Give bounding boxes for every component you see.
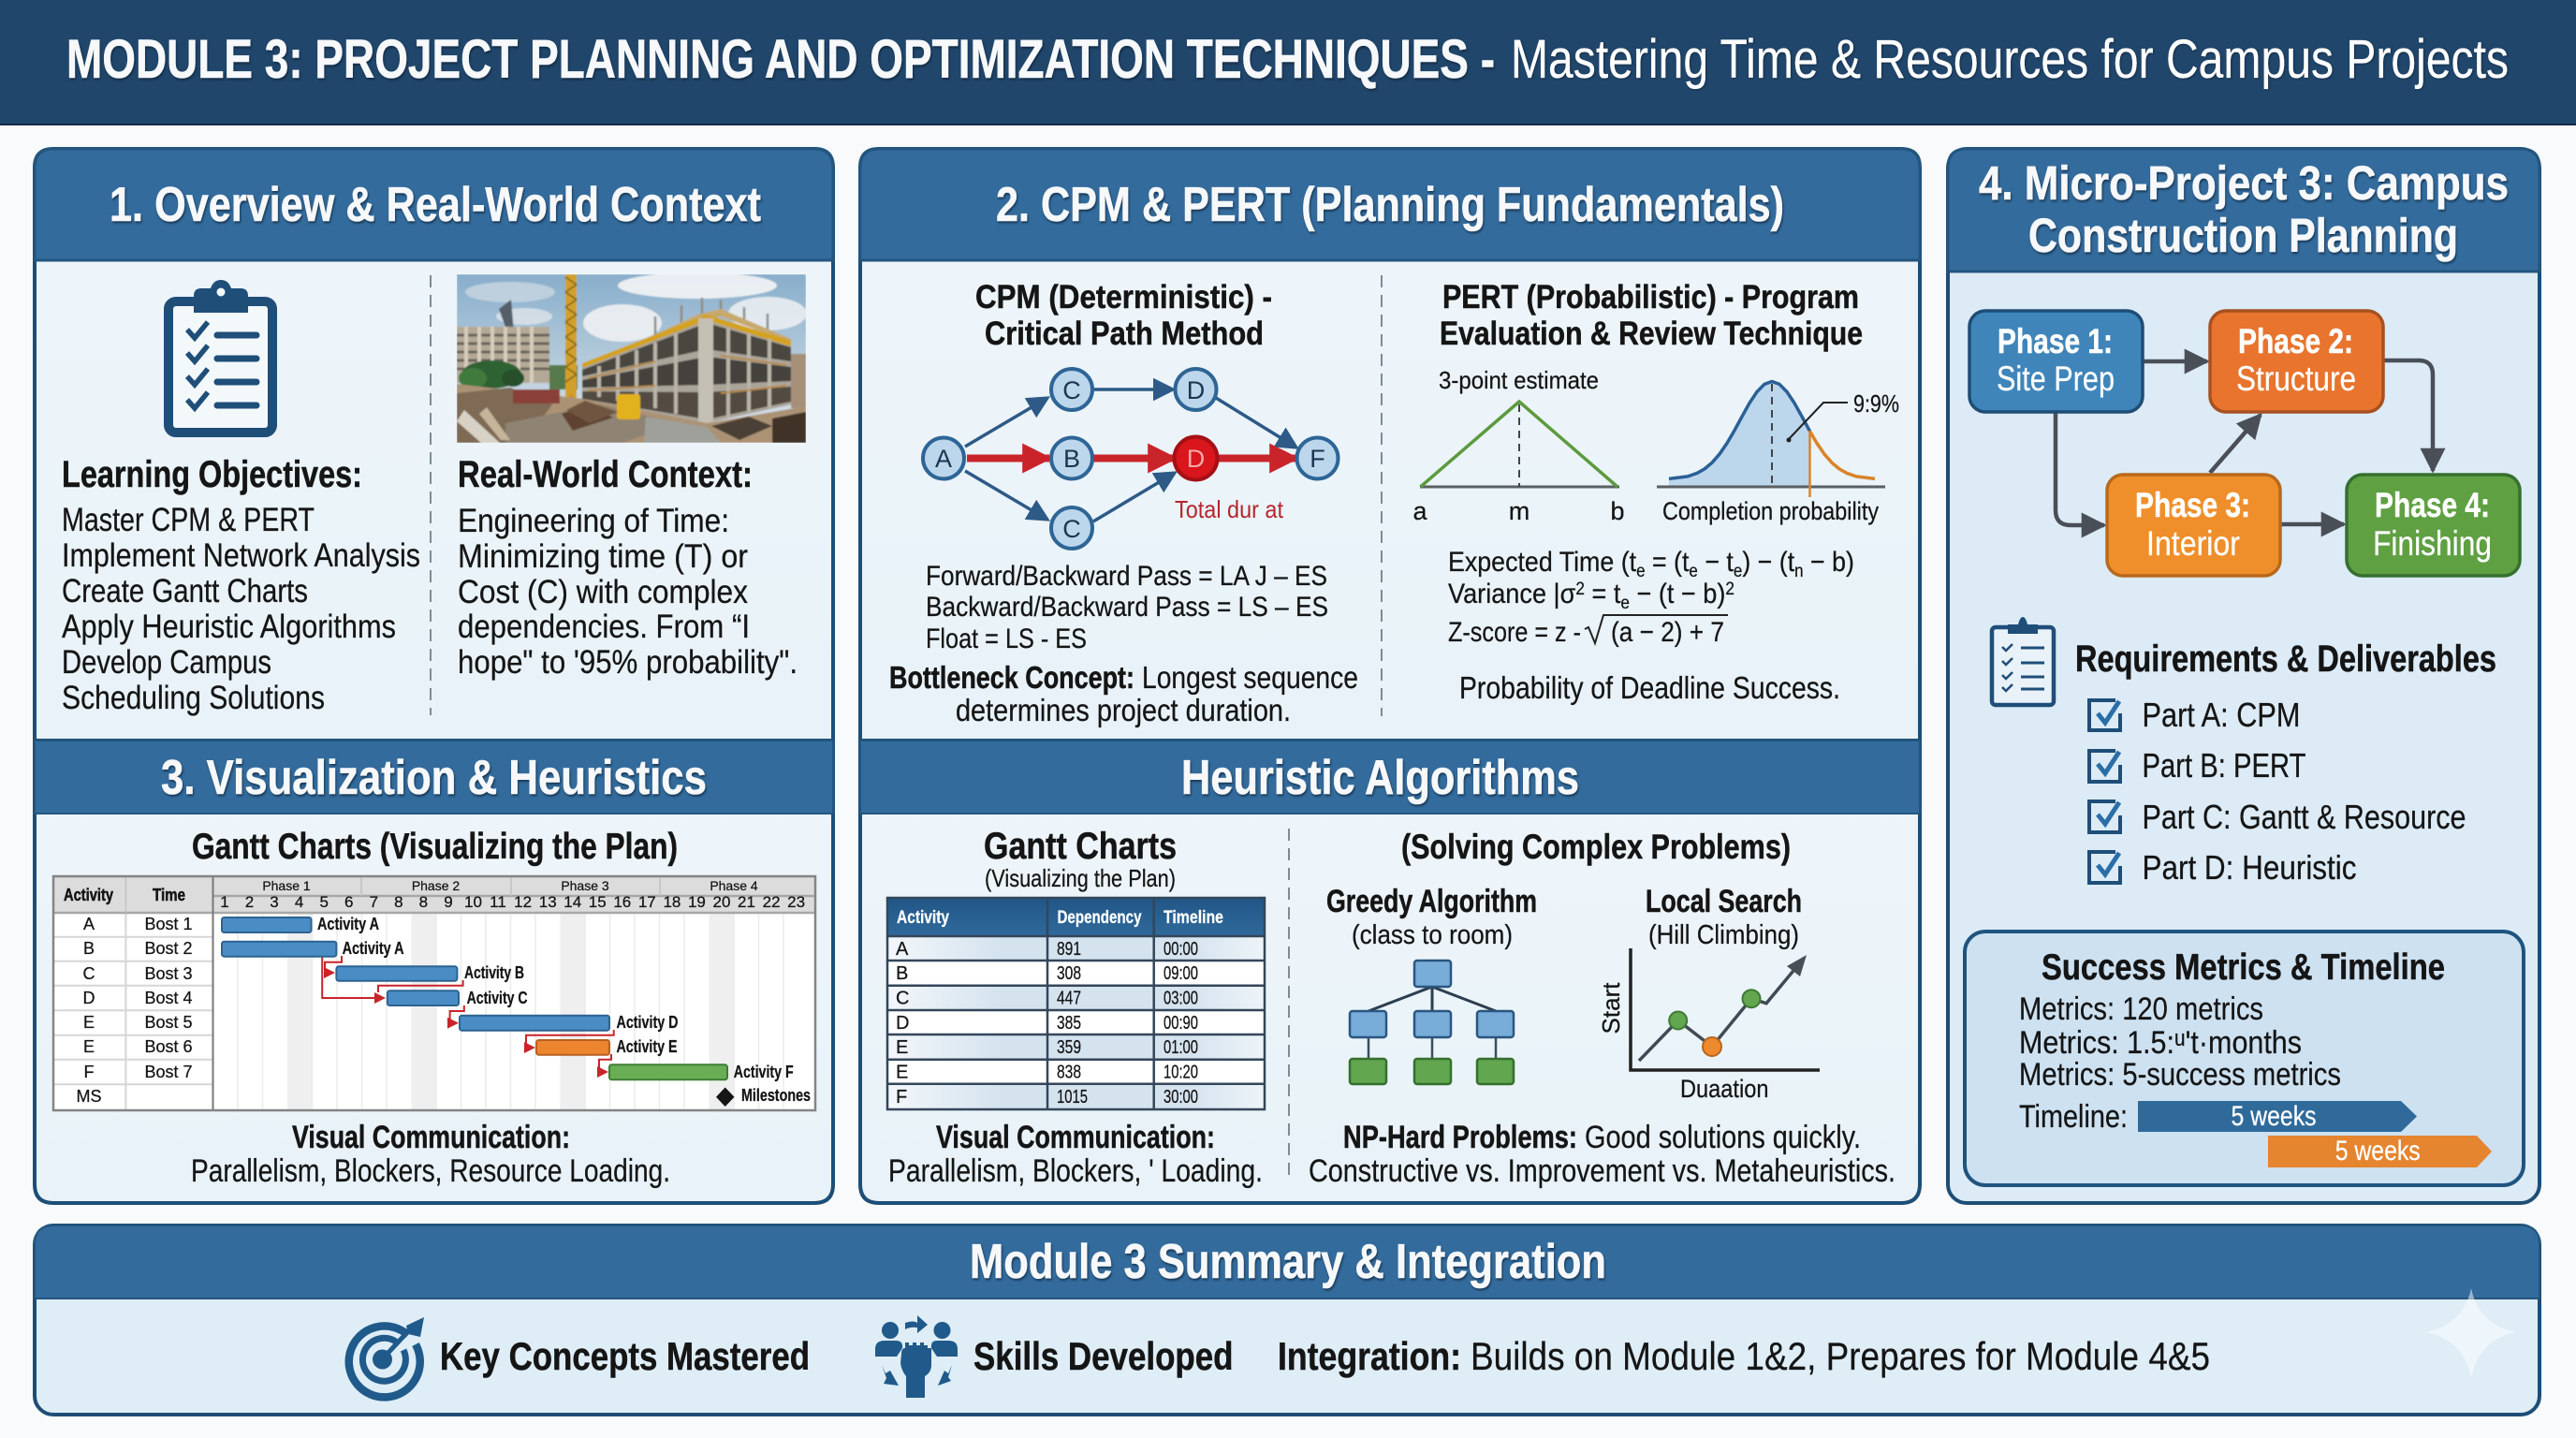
text block: PERT formulas: ) − (t bbox=[1742, 547, 1795, 578]
table: activity schedule: 308 bbox=[1057, 963, 1081, 984]
table: activity schedule: 03:00 bbox=[1164, 989, 1198, 1009]
chart: Gantt chart: Activity B bbox=[464, 963, 524, 982]
table: activity schedule: 385 bbox=[1057, 1013, 1081, 1034]
chart: Gantt chart: Phase 3 bbox=[561, 878, 609, 893]
text block: PERT formulas bbox=[1448, 547, 1854, 648]
text block: real-world context: Real-World Context: bbox=[458, 454, 753, 495]
chart: Gantt chart: 1 bbox=[220, 893, 229, 911]
text block: visual communication bbox=[888, 1120, 1263, 1189]
text block: bottleneck concept: determines project duration. bbox=[956, 693, 1291, 727]
chart: Gantt chart: 10 bbox=[464, 893, 482, 911]
checklist: parts: Part B: PERT bbox=[2142, 746, 2306, 785]
panel: success metrics & timeline bbox=[1965, 932, 2524, 1185]
text block: PERT formulas: 2 bbox=[1725, 580, 1734, 599]
text block: learning objectives: Implement Network Analysis bbox=[62, 537, 420, 574]
heading: Gantt charts: Gantt Charts (Visualizing the Plan) bbox=[192, 827, 678, 867]
text block: metrics bbox=[2019, 991, 2341, 1135]
chart: Gantt chart: E bbox=[83, 1013, 95, 1032]
chart: Gantt chart: Bost 7 bbox=[144, 1063, 193, 1081]
phase 3 box bbox=[2107, 475, 2280, 576]
table: activity schedule: C bbox=[896, 989, 909, 1009]
chart: Gantt chart: 5 bbox=[319, 893, 329, 911]
phase 4 box: Phase 4: bbox=[2375, 486, 2490, 524]
chart: Gantt chart: 8 bbox=[419, 893, 428, 911]
heading: CPM bbox=[975, 279, 1272, 352]
panel: 1. Overview & Real-World Context bbox=[35, 149, 833, 741]
chart: Gantt chart: Bost 6 bbox=[144, 1037, 193, 1056]
chart: Gantt chart: Activity D bbox=[616, 1013, 678, 1032]
table: activity schedule: 09:00 bbox=[1164, 963, 1198, 984]
table: activity schedule: 10:20 bbox=[1164, 1062, 1198, 1082]
chart: Gantt chart: 7 bbox=[370, 893, 378, 911]
chart: hill climbing: Duaation bbox=[1680, 1075, 1769, 1103]
heading: Gantt charts table: (Visualizing the Plan) bbox=[985, 864, 1176, 892]
chart: hill climbing bbox=[1597, 948, 1820, 1103]
table: activity schedule: 359 bbox=[1057, 1037, 1081, 1058]
table: activity schedule: Activity bbox=[897, 908, 949, 928]
heading: CPM: CPM (Deterministic) - bbox=[975, 279, 1272, 315]
text block: real-world context: hope" to '95% probability". bbox=[458, 644, 798, 681]
chart: Gantt chart: 22 bbox=[763, 893, 781, 911]
chart: 3-point estimate triangle: m bbox=[1509, 497, 1530, 525]
chart: completion probability curve: Completion probability bbox=[1662, 497, 1879, 525]
heading: Gantt charts table bbox=[984, 826, 1177, 892]
chart: Gantt chart: Activity A bbox=[317, 915, 379, 933]
timeline bar: 5 weeks orange bbox=[2268, 1136, 2492, 1167]
chart: CPM network diagram: A bbox=[935, 445, 952, 473]
panel heading: 4. Micro-Project 3: Campus bbox=[1979, 156, 2509, 210]
text block: CPM formulas bbox=[926, 561, 1328, 654]
chart: Gantt chart: Activity C bbox=[467, 989, 528, 1007]
text block: PERT formulas: − (t − b) bbox=[1630, 579, 1725, 609]
chart: Gantt chart: C bbox=[82, 964, 95, 983]
phase 1 box: Phase 1: bbox=[1998, 322, 2113, 360]
text block: learning objectives: Develop Campus bbox=[62, 644, 271, 681]
text: skills developed: Skills Developed bbox=[973, 1334, 1234, 1378]
chart: Gantt chart: Bost 1 bbox=[144, 915, 193, 933]
table: activity schedule: 891 bbox=[1057, 939, 1081, 960]
table: activity schedule: E bbox=[896, 1062, 908, 1082]
chart: 3-point estimate triangle: b bbox=[1610, 497, 1625, 525]
phase 1 box: Site Prep bbox=[1997, 360, 2115, 398]
text: key concepts mastered: Key Concepts Mastered bbox=[440, 1334, 810, 1378]
chart: Gantt chart: Milestones bbox=[741, 1086, 811, 1105]
timeline bar: 5 weeks blue: 5 weeks bbox=[2232, 1101, 2316, 1132]
icon: requirements clipboard bbox=[1992, 617, 2054, 705]
heading: greedy algorithm bbox=[1326, 884, 1537, 950]
text block: learning objectives: Master CPM & PERT bbox=[62, 502, 315, 538]
text block: PERT formulas: = t bbox=[1585, 579, 1621, 609]
chart: Gantt chart: Phase 4 bbox=[710, 878, 758, 893]
chart: Gantt chart: 14 bbox=[564, 893, 581, 911]
text block: real-world context: dependencies. From “I bbox=[458, 609, 750, 645]
chart: Gantt chart bbox=[53, 876, 815, 1110]
checklist: parts: Part A: CPM bbox=[2142, 696, 2301, 734]
text block: probability of deadline success: Probability of Deadline Success. bbox=[1459, 670, 1840, 705]
heading: greedy algorithm: (class to room) bbox=[1352, 920, 1513, 950]
table: activity schedule: 838 bbox=[1057, 1062, 1081, 1082]
chart: CPM network diagram: D bbox=[1187, 445, 1205, 473]
text: integration: Builds on Module 1&2, Prepares for Module 4&5 bbox=[1471, 1334, 2210, 1378]
text block: CPM formulas: Forward/Backward Pass = LA J – ES bbox=[926, 561, 1327, 592]
text block: NP-hard problems: NP-Hard Problems: bbox=[1343, 1120, 1577, 1155]
icon: team skills bbox=[875, 1315, 958, 1398]
text: integration: Integration: bbox=[1278, 1334, 1461, 1378]
icon: clipboard checklist bbox=[168, 280, 272, 433]
table: activity schedule: 1015 bbox=[1057, 1087, 1088, 1108]
chart: Gantt chart: 20 bbox=[713, 893, 730, 911]
panel heading: 1. Overview & Real-World Context bbox=[110, 178, 761, 232]
chart: Gantt chart: D bbox=[82, 989, 95, 1007]
chart: Gantt chart: 12 bbox=[514, 893, 532, 911]
table: activity schedule: A bbox=[896, 939, 909, 960]
text block: PERT formulas: = (t bbox=[1646, 547, 1690, 578]
panel: Module 3 summary & integration bbox=[35, 1225, 2539, 1415]
checklist: parts: Part D: Heuristic bbox=[2142, 848, 2357, 887]
phase 2 box bbox=[2210, 311, 2383, 412]
table: activity schedule: 01:00 bbox=[1164, 1037, 1198, 1058]
phase 4 box bbox=[2347, 475, 2520, 576]
text block: real-world context: Engineering of Time: bbox=[458, 503, 729, 539]
chart: Gantt chart: MS bbox=[77, 1087, 101, 1106]
chart: 3-point estimate triangle: 3-point estimate bbox=[1439, 366, 1599, 394]
chart: CPM network diagram bbox=[923, 369, 1339, 549]
flow arrows between phases bbox=[2056, 360, 2433, 525]
text block: bottleneck concept: Longest sequence bbox=[1142, 660, 1358, 695]
phase 4 box: Finishing bbox=[2373, 524, 2492, 563]
chart: completion probability curve bbox=[1657, 382, 1899, 525]
chart: Gantt chart: Phase 2 bbox=[412, 878, 460, 893]
text block: PERT formulas: e bbox=[1620, 594, 1630, 613]
phase 1 box bbox=[1969, 311, 2143, 412]
chart: Gantt chart: 6 bbox=[344, 893, 353, 911]
timeline bar: 5 weeks blue bbox=[2138, 1101, 2417, 1132]
chart: hill climbing: Start bbox=[1597, 982, 1625, 1034]
heading: success metrics: Success Metrics & Timeline bbox=[2042, 947, 2445, 988]
panel heading: Module 3 Summary & Integration bbox=[970, 1235, 1606, 1289]
chart: completion probability curve: 9:9% bbox=[1853, 389, 1899, 418]
checklist: parts bbox=[2089, 696, 2466, 887]
icon: sparkle bbox=[2426, 1288, 2516, 1378]
chart: CPM network diagram: F bbox=[1310, 445, 1325, 473]
chart: Gantt chart: Activity bbox=[64, 886, 113, 904]
chart: Gantt chart: 23 bbox=[787, 893, 805, 911]
text block: real-world context bbox=[458, 454, 798, 681]
table: activity schedule: 30:00 bbox=[1164, 1087, 1198, 1108]
chart: CPM network diagram: B bbox=[1063, 445, 1080, 473]
chart: Gantt chart: Activity F bbox=[734, 1063, 794, 1081]
chart: Gantt chart: Activity E bbox=[616, 1037, 678, 1056]
title banner bbox=[0, 0, 2576, 125]
heading: local search: (Hill Climbing) bbox=[1648, 920, 1799, 950]
chart: Gantt chart: 13 bbox=[539, 893, 557, 911]
table: activity schedule: E bbox=[896, 1037, 908, 1058]
text block: PERT formulas: Expected Time (t bbox=[1448, 547, 1659, 578]
panel: 2. CPM & PERT bbox=[860, 149, 1920, 741]
title banner: MODULE 3: PROJECT PLANNING AND OPTIMIZATION TECHNIQUES - bbox=[66, 29, 1495, 90]
text block: visual communication: Parallelism, Blockers, Resource Loading. bbox=[191, 1153, 670, 1189]
table: activity schedule: Dependency bbox=[1058, 908, 1142, 928]
text block: PERT formulas: Z-score = z - bbox=[1448, 617, 1581, 648]
text block: metrics: Metrics: 120 metrics bbox=[2019, 991, 2263, 1027]
chart: Gantt chart: E bbox=[83, 1037, 95, 1056]
chart: Gantt chart: 18 bbox=[663, 893, 681, 911]
chart: Gantt chart: 21 bbox=[738, 893, 755, 911]
chart: Gantt chart: Phase 1 bbox=[262, 878, 311, 893]
chart: Gantt chart: 4 bbox=[295, 893, 303, 911]
phase 2 box: Phase 2: bbox=[2238, 322, 2353, 360]
heading: greedy algorithm: Greedy Algorithm bbox=[1326, 884, 1537, 919]
heading: local search bbox=[1646, 884, 1802, 950]
heading: PERT bbox=[1440, 279, 1863, 352]
table: activity schedule: Timeline bbox=[1164, 908, 1223, 928]
panel heading bbox=[1979, 156, 2509, 262]
chart: Gantt chart: Bost 3 bbox=[144, 964, 193, 983]
text block: metrics: Timeline: bbox=[2019, 1099, 2128, 1135]
table: activity schedule: 447 bbox=[1057, 989, 1081, 1009]
panel: 4. Micro-Project 3 bbox=[1948, 149, 2539, 1203]
phase 3 box: Phase 3: bbox=[2135, 486, 2250, 524]
chart: Gantt chart: 17 bbox=[638, 893, 656, 911]
chart: Gantt chart: B bbox=[83, 939, 95, 958]
text block: learning objectives bbox=[62, 454, 420, 716]
text block: PERT formulas: e bbox=[1689, 562, 1698, 581]
text block: visual communication bbox=[191, 1120, 670, 1189]
heading: PERT: Evaluation & Review Technique bbox=[1440, 315, 1863, 352]
text block: NP-hard problems: Constructive vs. Improvement vs. Metaheuristics. bbox=[1309, 1153, 1895, 1189]
chart: Gantt chart: 11 bbox=[490, 893, 506, 911]
chart: Gantt chart: Time bbox=[153, 886, 185, 904]
chart: CPM network diagram: Total dur at bbox=[1175, 495, 1284, 523]
chart: Gantt chart: Bost 4 bbox=[144, 989, 193, 1007]
text block: bottleneck concept: Bottleneck Concept: bbox=[889, 660, 1134, 695]
chart: Gantt chart: Bost 5 bbox=[144, 1013, 193, 1032]
text block: PERT formulas: 2 bbox=[1575, 580, 1585, 599]
table: activity schedule: B bbox=[896, 963, 908, 984]
chart: CPM network diagram: C bbox=[1062, 376, 1081, 404]
text block: CPM formulas: Backward/Backward Pass = LS – ES bbox=[926, 592, 1328, 623]
heading: solving complex problems: (Solving Complex Problems) bbox=[1401, 828, 1791, 866]
text block: learning objectives: Learning Objectives: bbox=[62, 454, 362, 495]
chart: 3-point estimate triangle: a bbox=[1412, 497, 1427, 525]
panel heading: Construction Planning bbox=[2028, 209, 2458, 262]
panel heading: 3. Visualization & Heuristics bbox=[161, 751, 707, 805]
text block: NP-hard problems: Good solutions quickly. bbox=[1585, 1120, 1861, 1155]
text block: PERT formulas: − b) bbox=[1804, 547, 1854, 578]
text block: visual communication: Parallelism, Blockers, ' Loading. bbox=[888, 1153, 1263, 1189]
text block: PERT formulas: e bbox=[1636, 562, 1646, 581]
heading: Gantt charts table: Gantt Charts bbox=[984, 826, 1177, 867]
chart: Gantt chart: 3 bbox=[270, 893, 279, 911]
text block: PERT formulas: − t bbox=[1698, 547, 1734, 578]
text block: visual communication: Visual Communication: bbox=[292, 1120, 570, 1155]
chart: Gantt chart: 15 bbox=[589, 893, 607, 911]
heading: PERT: PERT (Probabilistic) - Program bbox=[1442, 279, 1859, 315]
chart: 3-point estimate triangle bbox=[1412, 366, 1625, 525]
text block: PERT formulas: n bbox=[1794, 562, 1804, 581]
chart: Gantt chart: Bost 2 bbox=[144, 939, 193, 958]
table: activity schedule: 00:00 bbox=[1164, 939, 1198, 960]
checklist: parts: Part C: Gantt & Resource bbox=[2142, 798, 2466, 836]
table: activity schedule: 00:90 bbox=[1164, 1013, 1198, 1034]
table: activity schedule: F bbox=[896, 1087, 907, 1108]
chart: Gantt chart: 2 bbox=[245, 893, 254, 911]
text block: PERT formulas: Variance |σ bbox=[1448, 579, 1589, 609]
chart: Gantt chart: 19 bbox=[688, 893, 706, 911]
text block: NP-hard problems bbox=[1309, 1120, 1895, 1189]
chart: CPM network diagram: C bbox=[1062, 515, 1081, 543]
timeline bar: 5 weeks orange: 5 weeks bbox=[2335, 1136, 2421, 1167]
heading: local search: Local Search bbox=[1646, 884, 1802, 919]
text block: learning objectives: Scheduling Solutions bbox=[62, 680, 325, 716]
heading: CPM: Critical Path Method bbox=[985, 315, 1264, 352]
panel: Heuristic Algorithms bbox=[860, 741, 1920, 1203]
chart: Gantt chart: F bbox=[84, 1063, 94, 1081]
diagram: greedy algorithm tree bbox=[1350, 961, 1514, 1084]
photo: construction site bbox=[457, 272, 807, 443]
text block: PERT formulas: (a − 2) + 7 bbox=[1611, 617, 1724, 648]
chart: Gantt chart: 16 bbox=[613, 893, 631, 911]
text block: visual communication: Visual Communication: bbox=[936, 1120, 1215, 1155]
table: activity schedule bbox=[887, 898, 1265, 1109]
table: activity schedule: D bbox=[896, 1013, 909, 1034]
text block: learning objectives: Apply Heuristic Algorithms bbox=[62, 609, 396, 645]
text block: bottleneck concept bbox=[889, 660, 1358, 727]
chart: Gantt chart: 8 bbox=[394, 893, 403, 911]
text block: metrics: Metrics: 5-success metrics bbox=[2019, 1057, 2341, 1093]
text block: PERT formulas: e bbox=[1734, 562, 1742, 581]
text block: CPM formulas: Float = LS - ES bbox=[926, 624, 1087, 654]
text block: metrics: Metrics: 1.5:ᵘ't·months bbox=[2019, 1025, 2302, 1061]
text block: learning objectives: Create Gantt Charts bbox=[62, 573, 308, 609]
text block: real-world context: Cost (C) with complex bbox=[458, 574, 748, 610]
chart: Gantt chart: 9 bbox=[444, 893, 453, 911]
icon: target bbox=[349, 1317, 424, 1397]
phase 2 box: Structure bbox=[2236, 360, 2356, 398]
phase 3 box: Interior bbox=[2146, 524, 2240, 563]
chart: CPM network diagram: D bbox=[1187, 376, 1205, 404]
panel heading: 2. CPM & PERT (Planning Fundamentals) bbox=[996, 178, 1784, 232]
text block: real-world context: Minimizing time (T) or bbox=[458, 538, 748, 575]
chart: Gantt chart: Activity A bbox=[343, 939, 404, 958]
panel heading: Heuristic Algorithms bbox=[1181, 751, 1579, 805]
panel: 3. Visualization & Heuristics bbox=[35, 741, 833, 1203]
chart: Gantt chart: A bbox=[83, 915, 95, 933]
